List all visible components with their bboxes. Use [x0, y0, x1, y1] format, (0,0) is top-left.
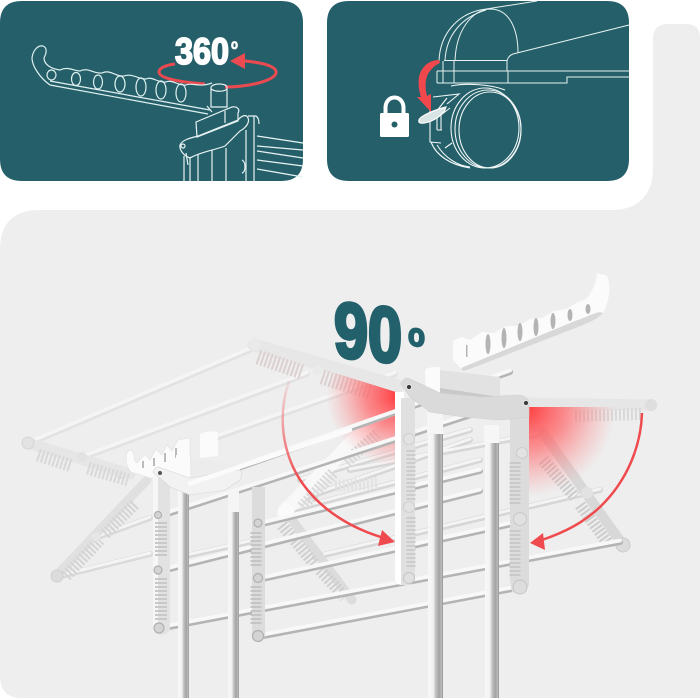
ghost rods — [28, 348, 600, 577]
rod end knobs — [154, 512, 264, 642]
ghost arm: right horizontal — [529, 399, 657, 416]
ghost arm: left rear angled — [51, 480, 147, 582]
ring arrow — [159, 61, 276, 87]
left hub block — [190, 457, 240, 480]
line drawing: hanger arm — [32, 46, 212, 114]
red highlight: left — [318, 373, 396, 480]
top plate — [401, 378, 529, 420]
left hanger slots — [143, 448, 176, 468]
arrow: left arm folds 90 degrees — [283, 381, 395, 546]
front right arm: main — [510, 405, 529, 594]
ghost arm: right angled — [543, 433, 630, 552]
main rack illustration — [22, 273, 657, 698]
ghost arm: centre angled — [278, 410, 383, 600]
360 degree label: 360 — [175, 31, 229, 72]
icon: padlock — [380, 98, 409, 137]
left post cap — [200, 431, 218, 458]
arrow: press lever down — [417, 60, 440, 112]
hanger holes — [466, 304, 590, 357]
90 degree label: 90 — [334, 285, 402, 380]
main poles — [427, 412, 499, 698]
left rear poles — [178, 490, 189, 698]
panel: wheel lock — [327, 1, 629, 181]
front left arm: main — [395, 392, 415, 585]
top left rod — [190, 430, 350, 484]
left front arm — [153, 473, 170, 635]
screws — [406, 384, 528, 406]
arrowhead: 360 rotation — [230, 53, 245, 69]
panel: 360 degree rotation — [0, 1, 303, 181]
left hanger arm — [126, 438, 190, 478]
line drawing: rack joint — [180, 84, 303, 181]
left top plate — [153, 467, 242, 495]
right hanger arm — [453, 273, 609, 371]
ghost arm: left horizontal — [22, 338, 398, 480]
hub block — [425, 367, 500, 403]
360 degree label: o — [231, 36, 238, 52]
solid rods — [158, 370, 620, 637]
arrow: right arm folds 90 degrees — [530, 413, 642, 550]
icon: lever — [419, 107, 446, 123]
left end assembly — [126, 431, 265, 698]
90 degree label: o — [408, 316, 425, 354]
line drawing: caster housing — [437, 1, 629, 83]
left rear arm — [252, 487, 265, 641]
red highlight: right — [529, 407, 630, 500]
line drawing: caster wheel — [430, 84, 521, 168]
